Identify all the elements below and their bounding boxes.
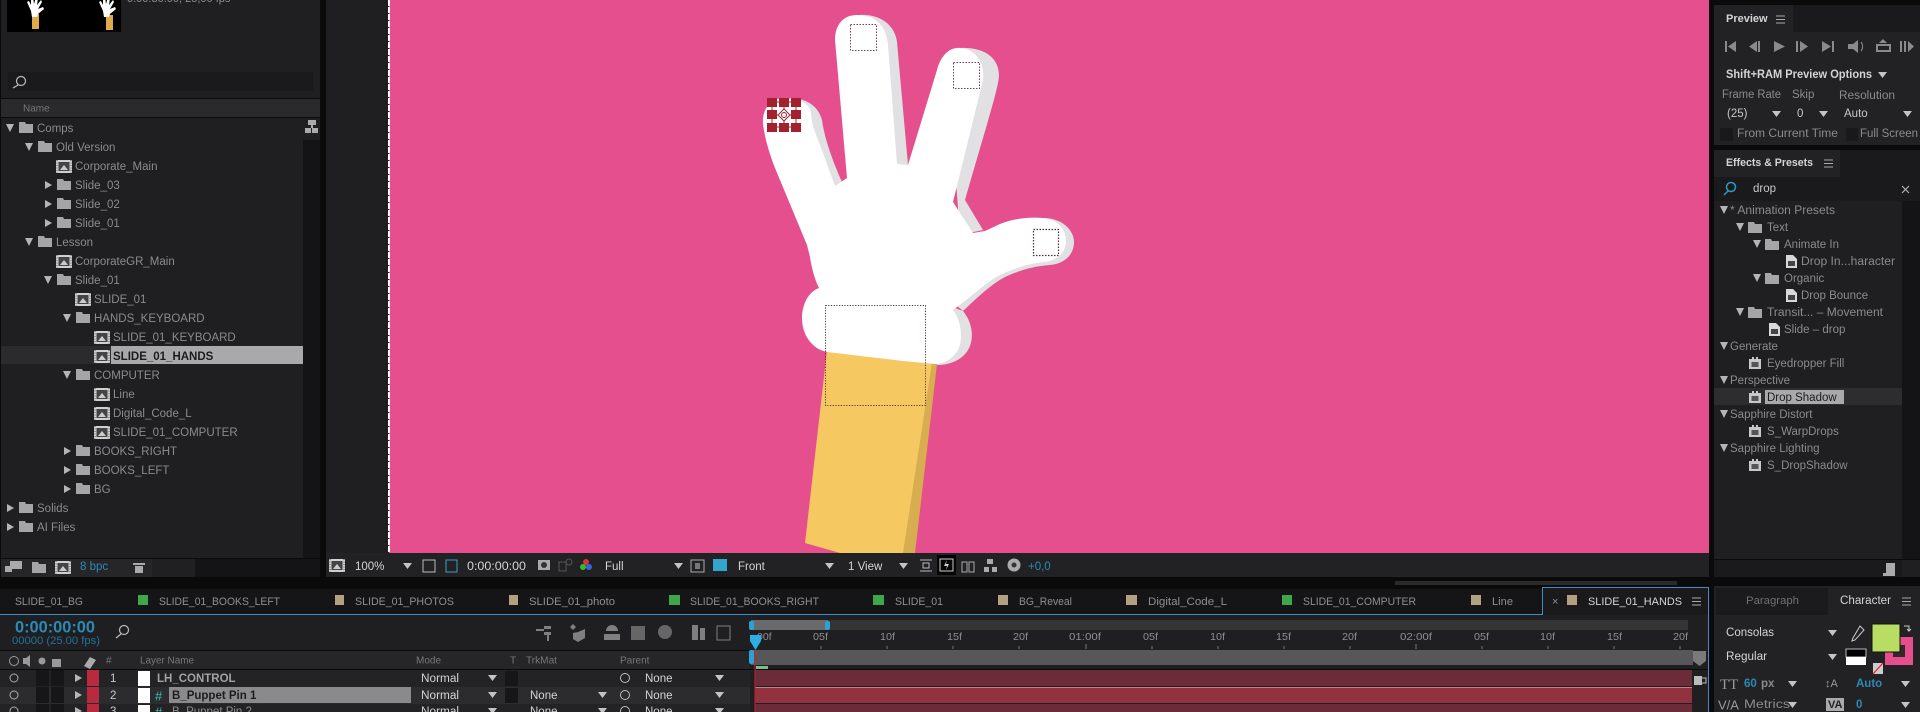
puppet pin box: ring finger	[954, 62, 980, 88]
project tree: HANDS_KEYBOARD	[94, 313, 205, 325]
project tree: Line	[113, 389, 135, 401]
project tree: Slide_03	[75, 180, 120, 192]
time ruler: 05f	[813, 631, 828, 643]
time ruler: 20f	[1342, 631, 1357, 643]
effects tree: Eyedropper Fill	[1767, 358, 1844, 370]
effects tree: Drop Shadow	[1767, 392, 1837, 404]
font size row: Auto	[1856, 678, 1882, 690]
kerning row	[1718, 698, 1910, 712]
time ruler: 01:00f	[1069, 631, 1101, 643]
effects tab	[1714, 150, 1840, 177]
preview options: Frame Rate	[1722, 89, 1781, 101]
effects tree: Drop In...haracter	[1801, 256, 1895, 268]
viewer toolbar: Full	[605, 561, 624, 573]
project tree: CorporateGR_Main	[75, 256, 175, 268]
project tree right strip	[303, 140, 320, 558]
effects tree: Transit... – Movement	[1767, 307, 1884, 319]
composition left edge	[388, 0, 390, 553]
project tree	[6, 122, 238, 534]
font size row: px	[1761, 678, 1775, 690]
effects tree: Text	[1767, 222, 1789, 234]
project tree: BG	[94, 484, 111, 496]
arm	[805, 350, 932, 553]
viewer toolbar: Front	[738, 561, 766, 573]
effects tree: Slide – drop	[1784, 324, 1845, 336]
white glove	[763, 15, 1066, 364]
composition tab bar: Digital_Code_L	[1148, 596, 1227, 608]
puppet pin box: thumb	[1034, 230, 1058, 256]
black white swatch	[1846, 649, 1866, 665]
project tree: Digital_Code_L	[113, 408, 192, 420]
layer header background: #	[106, 656, 112, 666]
effects tab: Effects & Presets	[1726, 157, 1813, 169]
effects tree: Perspective	[1730, 375, 1790, 387]
preview tab: Preview	[1726, 13, 1768, 25]
composition tab bar: SLIDE_01_PHOTOS	[355, 596, 454, 608]
layer header background: Mode	[416, 656, 441, 666]
stroke swatch	[1885, 637, 1913, 665]
composition tab bar: SLIDE_01_BG	[15, 596, 83, 608]
playback controls	[1725, 39, 1914, 53]
preview tab	[1714, 5, 1793, 32]
time ruler: 02:00f	[1400, 631, 1432, 643]
current time	[12, 618, 100, 647]
time ruler: 15f	[947, 631, 962, 643]
project tree: Comps	[37, 123, 74, 135]
font size row: 60	[1744, 678, 1757, 690]
time ruler: 10f	[880, 631, 895, 643]
project footer bar	[1, 558, 320, 577]
composition tab bar	[0, 587, 1709, 615]
layer row 2: None	[530, 690, 558, 702]
timeline panel outline	[0, 588, 1708, 712]
preview options: Skip	[1792, 89, 1814, 101]
composition tab bar: SLIDE_01_photo	[529, 596, 615, 608]
composition tab bar: BG_Reveal	[1019, 596, 1072, 608]
layer header background	[0, 650, 1709, 670]
effects tree: * Animation Presets	[1730, 205, 1835, 217]
composition tab bar: SLIDE_01	[895, 596, 943, 608]
time ruler: 10f	[1210, 631, 1225, 643]
layer row 2	[0, 687, 750, 704]
font size row: TT	[1720, 677, 1738, 693]
kerning row: VA	[1828, 699, 1843, 711]
fill swatch	[1872, 624, 1900, 652]
layer row 2: None	[645, 690, 672, 702]
character tab: Character	[1840, 595, 1891, 607]
layer row 1: LH_CONTROL	[157, 673, 236, 685]
effects tree: Generate	[1730, 341, 1778, 353]
puppet pin box: middle finger	[850, 24, 876, 50]
project thumbnail	[7, 0, 121, 32]
selected item background	[111, 346, 303, 364]
viewer toolbar: +0,0	[1028, 561, 1051, 573]
font settings	[1726, 627, 1837, 663]
selected effect label	[1765, 390, 1844, 404]
preview options: Full Screen	[1860, 128, 1918, 140]
panel: preview	[1714, 5, 1920, 145]
effects footer	[1714, 559, 1920, 577]
composition tab bar: SLIDE_01_COMPUTER	[1303, 596, 1416, 608]
layer row 2: Normal	[421, 690, 459, 702]
preview options: From Current Time	[1737, 128, 1838, 140]
effects search: drop	[1753, 183, 1776, 195]
project tree: SLIDE_01	[94, 294, 146, 306]
eyedropper	[1852, 626, 1864, 641]
time ruler	[757, 631, 1688, 649]
selected row highlight	[1, 346, 303, 364]
project tree: BOOKS_RIGHT	[94, 446, 177, 458]
project tree: Slide_01	[75, 218, 120, 230]
layer row 2: #	[155, 688, 163, 704]
layer row 2: 2	[110, 690, 116, 702]
project tree: Slide_01	[75, 275, 120, 287]
time ruler: 00f	[757, 631, 772, 643]
project tree: Lesson	[56, 237, 93, 249]
time ruler: 15f	[1607, 631, 1622, 643]
layer row 1	[0, 670, 750, 687]
effects tree: Animate In	[1784, 239, 1839, 251]
panel: timeline	[0, 615, 1709, 712]
panel: project	[1, 0, 320, 577]
effects tree	[1720, 205, 1895, 472]
layer row 1: 1	[110, 673, 116, 685]
effects tree: Sapphire Distort	[1730, 409, 1813, 421]
project tree: SLIDE_01_HANDS	[113, 351, 214, 363]
preview options: (25)	[1727, 108, 1748, 120]
font size row	[1720, 677, 1910, 693]
font settings: Regular	[1726, 651, 1767, 663]
hand shadow	[790, 15, 1074, 365]
upper scrollbar sliver	[1395, 581, 1677, 585]
project column header	[1, 98, 320, 118]
swap arrows	[1904, 626, 1911, 631]
layer bars	[755, 666, 1692, 712]
kerning row: 0	[1856, 699, 1862, 711]
paragraph tab	[1716, 588, 1828, 615]
effects tree right strip	[1902, 201, 1920, 559]
effects tree: Organic	[1784, 273, 1825, 285]
time ruler: 20f	[1013, 631, 1028, 643]
flowchart icon	[305, 120, 318, 133]
preview options: Resolution	[1839, 90, 1895, 102]
time ruler: 10f	[1540, 631, 1555, 643]
project tree: SLIDE_01_KEYBOARD	[113, 332, 236, 344]
project tree: BOOKS_LEFT	[94, 465, 169, 477]
selected effect row	[1714, 388, 1902, 405]
arm side	[903, 360, 937, 553]
layer row 1: Normal	[421, 673, 459, 685]
viewer toolbar: 1 View	[848, 561, 883, 573]
time ruler: 20f	[1673, 631, 1688, 643]
pink composition background	[389, 0, 1709, 553]
panel: character	[1714, 586, 1920, 712]
timeline switches	[536, 624, 730, 642]
puppet pin box: wrist	[826, 306, 926, 406]
font settings: Consolas	[1726, 627, 1774, 639]
selected puppet pin handles	[767, 98, 801, 132]
paragraph tab: Paragraph	[1746, 595, 1799, 607]
project tree: Old Version	[56, 142, 115, 154]
viewer toolbar	[326, 553, 1709, 577]
project tree: SLIDE_01_COMPUTER	[113, 427, 238, 439]
effects tree: S_WarpDrops	[1767, 426, 1839, 438]
active tab	[1542, 587, 1709, 615]
layer header background: Parent	[620, 656, 650, 666]
layer header background: T	[510, 656, 516, 666]
project tree: Corporate_Main	[75, 161, 157, 173]
viewer toolbar: 0:00:00:00	[467, 561, 526, 573]
active tab: ×	[1552, 596, 1558, 608]
active tab: SLIDE_01_HANDS	[1588, 596, 1682, 608]
effects tree: Sapphire Lighting	[1730, 443, 1820, 455]
preview options: Shift+RAM Preview Options	[1726, 69, 1872, 81]
project search field	[8, 72, 313, 91]
panel: effects and presets	[1714, 150, 1920, 577]
project tree: COMPUTER	[94, 370, 160, 382]
kerning row: Metrics	[1744, 699, 1790, 711]
viewer toolbar: 100%	[355, 561, 384, 573]
current time: 00000 (25.00 fps)	[12, 635, 100, 647]
project tree: Solids	[37, 503, 69, 515]
current time indicator	[749, 635, 761, 712]
project column header: Name	[23, 104, 50, 114]
composition tab bar: SLIDE_01_BOOKS_LEFT	[159, 596, 280, 608]
layer header background: Layer Name	[140, 656, 194, 666]
layer row 3	[0, 704, 750, 712]
comp button	[1694, 676, 1706, 685]
current time: 0:00:00:00	[15, 618, 95, 636]
layer row 1: None	[645, 673, 672, 685]
timeline search	[116, 626, 128, 638]
preview options	[1720, 69, 1918, 141]
font size row: ↕A	[1825, 678, 1838, 690]
work area navigator	[749, 620, 1688, 630]
preview options: 0	[1797, 108, 1803, 120]
time ruler: 15f	[1276, 631, 1291, 643]
layer header background: TrkMat	[526, 656, 557, 666]
time ruler: 05f	[1143, 631, 1158, 643]
layer row 2: B_Puppet Pin 1	[172, 690, 257, 702]
time ruler: 05f	[1474, 631, 1489, 643]
panel: composition viewer	[326, 0, 1709, 577]
hand illustration	[763, 15, 1074, 553]
project tree: AI Files	[37, 522, 76, 534]
none swatch	[1873, 663, 1883, 674]
preview options: Auto	[1844, 108, 1868, 120]
effects tree: Drop Bounce	[1801, 290, 1868, 302]
work area bar	[751, 650, 1693, 665]
project tree: Slide_02	[75, 199, 120, 211]
composition tab bar: SLIDE_01_BOOKS_RIGHT	[690, 596, 819, 608]
effects search	[1714, 177, 1920, 201]
work area end marker	[1693, 651, 1706, 666]
composition tab bar: Line	[1492, 596, 1513, 608]
project footer bar: 8 bpc	[80, 561, 108, 573]
effects tree: S_DropShadow	[1767, 460, 1848, 472]
